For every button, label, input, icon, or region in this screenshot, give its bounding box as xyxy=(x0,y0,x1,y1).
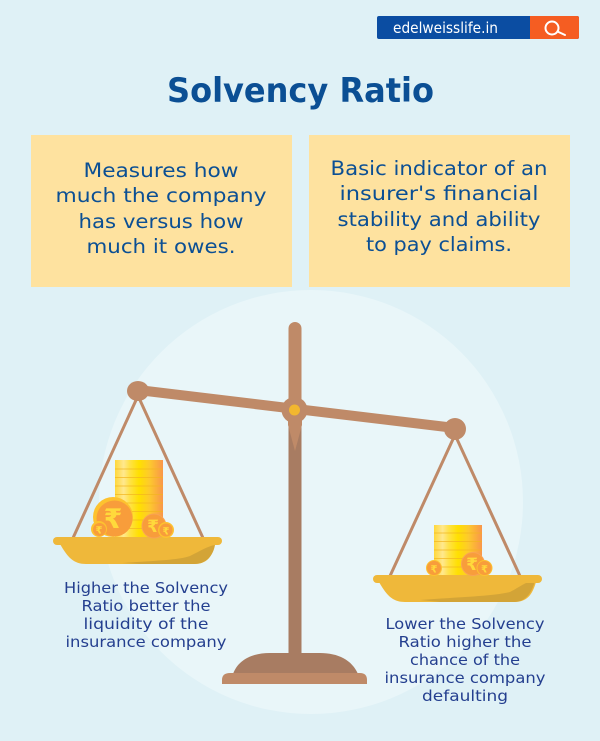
scale illustration xyxy=(53,322,542,684)
panel text: much it owes. xyxy=(86,235,236,258)
caption: lower ratio: insurance company xyxy=(384,669,546,687)
right coin stack xyxy=(434,525,482,575)
icon: magnifier xyxy=(546,22,565,35)
caption: lower ratio: chance of the xyxy=(410,651,520,669)
panel text xyxy=(56,159,266,258)
scale base xyxy=(222,653,367,684)
panel text: has versus how xyxy=(78,210,244,233)
medium coin xyxy=(462,552,484,576)
title: Solvency Ratio xyxy=(167,71,434,110)
caption: lower ratio: defaulting xyxy=(422,687,508,705)
scale beam xyxy=(127,381,466,440)
medium coin xyxy=(142,514,166,538)
logo text: edelweisslife.in xyxy=(393,19,498,37)
panel text xyxy=(330,157,548,256)
panel text: Basic indicator of an xyxy=(330,157,548,180)
small coin: ₹ xyxy=(96,526,103,536)
background circle xyxy=(99,290,523,714)
caption: higher ratio: liquidity of the xyxy=(84,615,208,633)
left strings xyxy=(73,398,203,538)
right strings xyxy=(390,437,520,576)
right pan dish xyxy=(373,575,542,602)
caption: higher ratio: insurance company xyxy=(66,633,227,651)
scale post xyxy=(288,322,302,662)
left pan xyxy=(53,398,222,564)
logo badge xyxy=(377,16,579,39)
medium coin: ₹ xyxy=(147,517,159,537)
left pan dish xyxy=(53,537,222,564)
panel text: much the company xyxy=(56,184,266,207)
caption: lower ratio xyxy=(384,615,546,705)
panel: indicator xyxy=(309,135,570,287)
small coin xyxy=(158,522,174,538)
panel: measures xyxy=(31,135,292,287)
caption: higher ratio: Ratio better the xyxy=(82,597,210,615)
panel text: Measures how xyxy=(84,159,239,182)
large coin: ₹ xyxy=(104,504,122,535)
coin xyxy=(426,560,442,576)
large coin xyxy=(93,497,133,537)
left coin stack xyxy=(115,460,163,537)
small coin xyxy=(91,521,107,537)
caption: higher ratio xyxy=(64,579,228,651)
caption: higher ratio: Higher the Solvency xyxy=(64,579,228,597)
coin: ₹ xyxy=(431,564,438,576)
panel text: to pay claims. xyxy=(366,233,512,256)
small coin: ₹ xyxy=(481,564,488,576)
caption: lower ratio: Ratio higher the xyxy=(398,633,532,651)
small coin: ₹ xyxy=(163,526,170,538)
small coin xyxy=(477,560,492,576)
caption: lower ratio: Lower the Solvency xyxy=(386,615,545,633)
panel text: stability and ability xyxy=(338,208,540,231)
right pan xyxy=(373,437,542,602)
medium coin: ₹ xyxy=(466,555,478,575)
panel text: insurer's financial xyxy=(340,182,538,205)
